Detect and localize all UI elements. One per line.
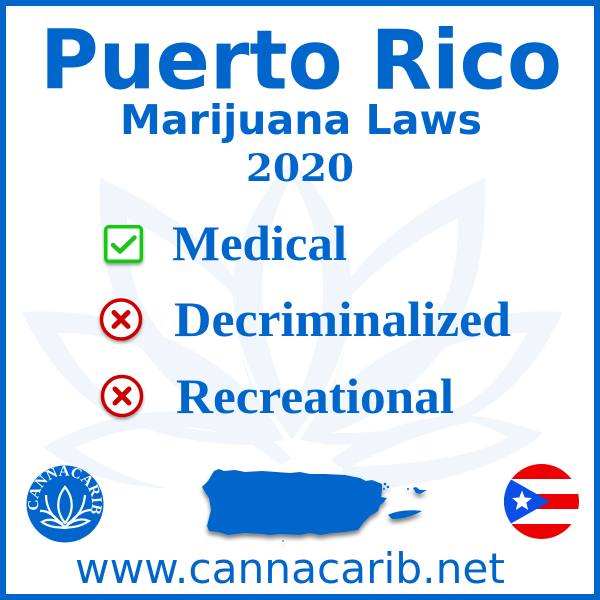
logo lotus mark xyxy=(40,487,91,528)
icon: green check box xyxy=(106,227,141,261)
CannaCarib logo xyxy=(26,466,104,542)
year: 2020 xyxy=(246,146,354,190)
icon: red cross circle xyxy=(102,300,140,339)
subtitle: Marijuana Laws: Marijuana Laws xyxy=(120,96,482,144)
CannaCarib logo: CANNACARIB xyxy=(28,466,102,514)
status row: Medical xyxy=(106,215,347,271)
website URL: www.cannacarib.net xyxy=(75,544,505,593)
background lotus watermark xyxy=(22,160,563,490)
label: Recreational: Recreational xyxy=(176,368,454,424)
logo lettering xyxy=(38,476,92,510)
status row: Decriminalized xyxy=(102,291,511,347)
label: Decriminalized: Decriminalized xyxy=(174,291,511,347)
map of Puerto Rico xyxy=(202,469,427,542)
Puerto Rico flag xyxy=(504,464,579,539)
label: Medical: Medical xyxy=(172,215,347,271)
icon: red cross circle xyxy=(102,376,142,416)
status row: Recreational xyxy=(102,368,454,424)
title: Puerto Rico: Puerto Rico xyxy=(40,14,562,108)
